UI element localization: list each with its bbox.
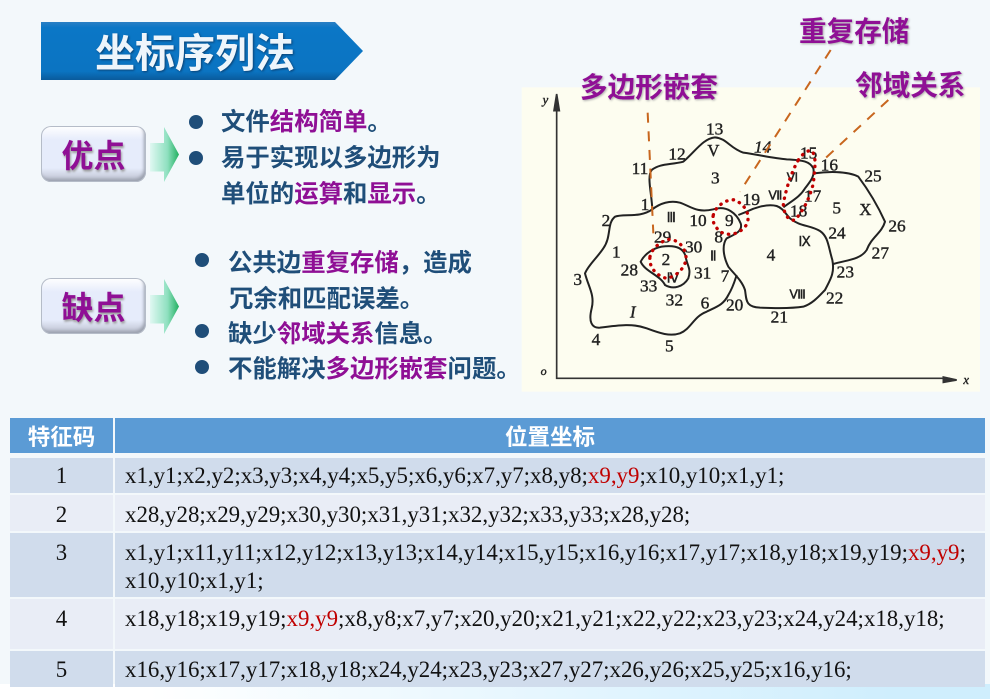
- point labels: 15: [800, 143, 817, 162]
- point labels: 1: [612, 242, 621, 261]
- disadvantages list: 不能解决多边形嵌套问题。: [228, 356, 521, 383]
- badge: advantages: 优点: [61, 138, 126, 174]
- point labels: 4: [767, 246, 776, 265]
- advantages list: 易于实现以多边形为: [221, 145, 441, 172]
- point labels: Ⅳ: [667, 271, 679, 286]
- row 1: x1,y1;x2,y2;x3,y3;x4,y4;x5,y5;x6,y6;x7,y7;x8,y8;x9,y9;x10,y10;x1,y1;: [125, 463, 784, 488]
- disadvantages list: [195, 250, 521, 383]
- point labels: 10: [689, 211, 707, 230]
- point labels: 29: [654, 228, 671, 247]
- point labels: 25: [864, 167, 882, 186]
- point labels: 2: [662, 250, 670, 269]
- point labels: 24: [828, 223, 846, 242]
- row 4: x18,y18;x19,y19;x9,y9;x8,y8;x7,y7;x20,y20;x21,y21;x22,y22;x23,y23;x24,y24;x18,y18;: [125, 606, 945, 631]
- point labels: 5: [665, 337, 674, 356]
- point labels: 1: [641, 195, 649, 214]
- advantages list: 单位的运算和显示。: [221, 181, 441, 208]
- label: adjacency: 邻域关系: [855, 70, 965, 101]
- point labels: Ⅲ: [667, 210, 676, 225]
- badge: disadvantages: 缺点: [61, 290, 126, 326]
- point labels: Ⅸ: [798, 234, 811, 249]
- point labels: Ⅷ: [789, 287, 806, 301]
- point labels: 28: [621, 260, 638, 279]
- arrow: disadvantages: [150, 279, 179, 334]
- point labels: 18: [790, 202, 807, 221]
- row 1: [10, 458, 985, 493]
- point labels: 4: [592, 330, 601, 349]
- title banner: 坐标序列法: [95, 32, 295, 76]
- row 3: x10,y10;x1,y1;: [125, 568, 264, 593]
- point labels: x: [962, 373, 969, 387]
- bottom background strip: [0, 684, 990, 699]
- point labels: 21: [771, 308, 788, 327]
- point labels: 33: [640, 277, 657, 296]
- row 5: [10, 651, 985, 687]
- disadvantages list: 缺少邻域关系信息。: [228, 321, 448, 348]
- point labels: 16: [821, 156, 838, 175]
- table: [10, 418, 985, 687]
- point labels: 12: [668, 144, 686, 163]
- point labels: 22: [826, 288, 843, 307]
- point labels: 7: [721, 267, 730, 286]
- point labels: 9: [725, 211, 734, 230]
- point labels: 8: [714, 228, 723, 247]
- point labels: 14: [754, 137, 772, 156]
- red dotted highlights: [650, 151, 815, 278]
- axes: [554, 94, 957, 382]
- advantages list: [189, 108, 441, 208]
- map background: [522, 87, 980, 392]
- point labels: V: [707, 141, 719, 160]
- row 2: x28,y28;x29,y29;x30,y30;x31,y31;x32,y32;x33,y33;x28,y28;: [125, 502, 690, 527]
- badge: disadvantages: [41, 278, 146, 334]
- disadvantages list: 公共边重复存储，造成: [228, 250, 472, 277]
- point labels: 27: [872, 243, 889, 262]
- point labels: 19: [743, 190, 760, 209]
- point labels: 5: [832, 198, 841, 217]
- row 3: [10, 533, 985, 597]
- row 2: 2: [56, 502, 67, 527]
- row 3: 3: [56, 540, 67, 565]
- point labels: [541, 93, 969, 387]
- advantages list: 文件结构简单。: [221, 109, 392, 136]
- polygon boundaries: [585, 137, 885, 335]
- table header: [10, 418, 985, 453]
- point labels: X: [859, 200, 871, 219]
- point labels: 3: [711, 168, 720, 187]
- point labels: 31: [694, 263, 711, 282]
- point labels: 32: [666, 290, 683, 309]
- point labels: I: [629, 303, 637, 322]
- row 4: [10, 599, 985, 649]
- point labels: o: [541, 364, 547, 378]
- label: polygon nesting: 多边形嵌套: [580, 72, 718, 103]
- point labels: Ⅵ: [787, 171, 798, 185]
- point labels: 23: [837, 262, 854, 281]
- diagram: polygon map: [522, 50, 980, 392]
- point labels: 17: [804, 186, 822, 205]
- point labels: 13: [706, 119, 723, 138]
- point labels: Ⅶ: [768, 188, 783, 202]
- row 2: [10, 495, 985, 531]
- table header: 位置坐标: [505, 425, 595, 450]
- callout leader lines: [648, 50, 888, 233]
- point labels: 3: [573, 270, 582, 289]
- row 1: 1: [56, 463, 67, 488]
- point labels: 30: [685, 238, 702, 257]
- table header: 特征码: [28, 425, 95, 450]
- point labels: y: [541, 93, 549, 107]
- point labels: 26: [888, 217, 906, 236]
- point labels: 2: [602, 211, 610, 230]
- disadvantages list: 冗余和匹配误差。: [229, 286, 424, 313]
- arrow: advantages: [150, 127, 179, 182]
- row 4: 4: [56, 606, 67, 631]
- row 5: x16,y16;x17,y17;x18,y18;x24,y24;x23,y23;x27,y27;x26,y26;x25,y25;x16,y16;: [125, 657, 852, 682]
- point labels: 11: [632, 159, 648, 178]
- row 3: x1,y1;x11,y11;x12,y12;x13,y13;x14,y14;x15,y15;x16,y16;x17,y17;x18,y18;x19,y19;x9,y9;: [125, 540, 966, 565]
- point labels: 6: [701, 293, 710, 312]
- badge: advantages: [41, 126, 146, 182]
- title banner: [41, 22, 363, 80]
- row 5: 5: [56, 657, 67, 682]
- point labels: 20: [726, 296, 743, 315]
- point labels: Ⅱ: [710, 249, 717, 264]
- label: duplicate storage: 重复存储: [799, 16, 909, 47]
